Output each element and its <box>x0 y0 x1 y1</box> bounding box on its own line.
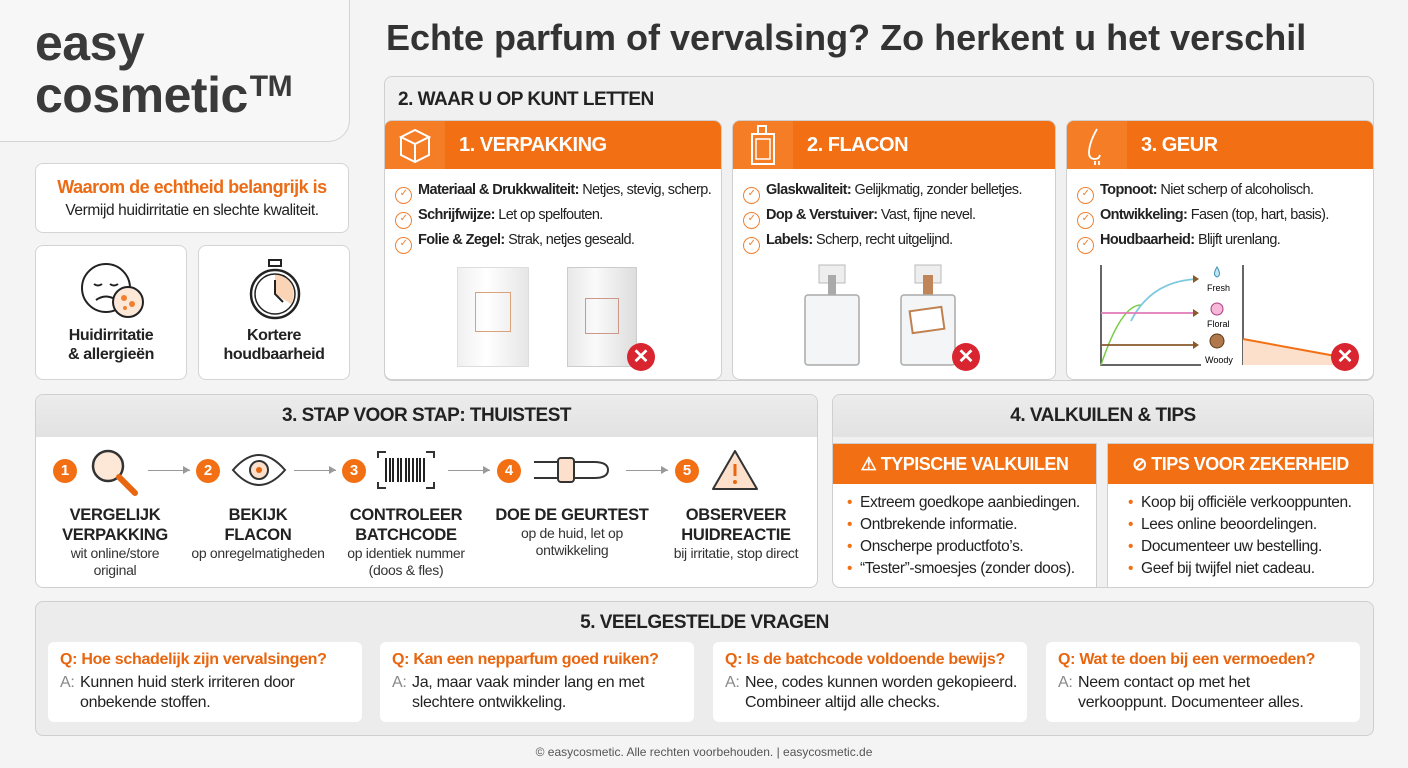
faq 1: Kunnen huid sterk irriteren door onbekende stoffen. <box>80 674 295 711</box>
list: Documenteer uw bestelling. <box>1141 538 1322 555</box>
chart: scent development <box>1100 265 1334 366</box>
text: HUIDREACTIE <box>681 526 791 544</box>
text: wit online/store <box>71 545 159 561</box>
label: & allergieën <box>68 346 154 363</box>
faq 3 <box>713 642 1027 722</box>
header <box>385 121 721 169</box>
faq 1 <box>48 642 362 722</box>
list: Lees online beoordelingen. <box>1141 516 1317 533</box>
text: ontwikkeling <box>536 542 608 558</box>
text: op de huid, let op <box>521 525 623 541</box>
faq 2: Q: Kan een nepparfum goed ruiken? <box>392 651 659 668</box>
icon: barcode <box>377 451 435 489</box>
text: VERPAKKING <box>62 526 168 544</box>
panel: veelgestelde vragen <box>35 601 1374 736</box>
faq 2 <box>380 642 694 722</box>
text: original <box>94 562 136 578</box>
checklist: Ontwikkeling: Fasen (top, hart, basis). <box>1100 207 1329 223</box>
text: op identiek nummer <box>347 545 465 561</box>
label: Kortere <box>247 327 301 344</box>
header: ⊘ TIPS VOOR ZEKERHEID <box>1132 454 1349 474</box>
card: flacon: ✕ <box>958 346 974 368</box>
icon: stopwatch <box>250 259 300 320</box>
list: Ontbrekende informatie. <box>860 516 1017 533</box>
card: verpakking <box>384 120 722 380</box>
icon: magnifier <box>92 450 138 496</box>
why box <box>35 163 349 233</box>
text: VERGELIJK <box>70 506 160 524</box>
card: typische valkuilen <box>832 443 1097 588</box>
card: tips <box>1107 443 1374 588</box>
card: verpakking: ✕ <box>633 346 649 368</box>
checklist <box>743 182 1022 254</box>
why heading: Waarom de echtheid belangrijk is <box>57 177 327 197</box>
logo text: easy <box>35 15 144 71</box>
icon: sad face <box>81 263 144 318</box>
label <box>224 327 324 363</box>
list: Geef bij twijfel niet cadeau. <box>1141 560 1315 577</box>
icon: eye <box>232 454 286 486</box>
text: (doos & fles) <box>369 562 443 578</box>
header <box>1067 121 1373 169</box>
step 3 <box>342 451 465 578</box>
title: Echte parfum of vervalsing? Zo herkent u het verschil <box>386 17 1306 58</box>
checklist <box>1077 182 1329 254</box>
heading <box>833 395 1373 437</box>
step 2 <box>191 454 325 561</box>
step 5 <box>674 450 798 561</box>
checklist: Labels: Scherp, recht uitgelijnd. <box>766 232 953 248</box>
images: bottles <box>804 264 956 366</box>
header: 1. VERPAKKING <box>459 134 607 156</box>
list <box>1128 494 1352 577</box>
icon: warning <box>712 450 758 490</box>
checklist: Folie & Zegel: Strak, netjes geseald. <box>418 232 634 248</box>
heading <box>36 395 817 437</box>
header: 2. FLACON <box>807 134 908 156</box>
header <box>833 444 1096 484</box>
checklist <box>395 182 711 254</box>
text: bij irritatie, stop direct <box>674 545 798 561</box>
header: ⚠ TYPISCHE VALKUILEN <box>861 454 1068 474</box>
card: geur: ✕ <box>1337 346 1353 368</box>
faq 4: Q: Wat te doen bij een vermoeden? <box>1058 651 1315 668</box>
text: CONTROLEER <box>350 506 462 524</box>
panel: waar u op kunt letten <box>384 76 1374 381</box>
faq 4: A: <box>1058 674 1073 691</box>
logo text: cosmeticTM <box>35 67 292 123</box>
checklist: Schrijfwijze: Let op spelfouten. <box>418 207 603 223</box>
faq 4 <box>1046 642 1360 722</box>
faq 3: Nee, codes kunnen worden gekopieerd. Combineer altijd alle checks. <box>745 674 1017 711</box>
text: OBSERVEER <box>686 506 786 524</box>
footer: © easycosmetic. Alle rechten voorbehouden. | easycosmetic.de <box>536 745 872 759</box>
step 4 <box>495 457 649 558</box>
faq 3: Q: Is de batchcode voldoende bewijs? <box>725 651 1005 668</box>
faq 2: Ja, maar vaak minder lang en met slechtere ontwikkeling. <box>412 674 644 711</box>
checklist: Materiaal & Drukkwaliteit: Netjes, stevig, scherp. <box>418 182 711 198</box>
header <box>733 121 1055 169</box>
heading: 3. STAP VOOR STAP: THUISTEST <box>282 405 571 426</box>
card: huidirritatie <box>35 245 187 380</box>
label <box>68 327 154 363</box>
checklist: Glaskwaliteit: Gelijkmatig, zonder belletjes. <box>766 182 1022 198</box>
card: houdbaarheid <box>198 245 350 380</box>
text: 5 <box>683 462 691 479</box>
text: DOE DE GEURTEST <box>495 506 649 524</box>
list: Onscherpe productfoto’s. <box>860 538 1023 555</box>
card: flacon <box>732 120 1056 380</box>
text: 2 <box>204 462 212 479</box>
heading: 5. VEELGESTELDE VRAGEN <box>580 612 829 633</box>
heading: 2. WAAR U OP KUNT LETTEN <box>398 89 654 110</box>
checklist: Houdbaarheid: Blijft urenlang. <box>1100 232 1280 248</box>
faq 1: Q: Hoe schadelijk zijn vervalsingen? <box>60 651 327 668</box>
step 1 <box>53 450 168 578</box>
text: 3 <box>350 462 358 479</box>
text: FLACON <box>225 526 291 544</box>
faq 4: Neem contact op met het verkooppunt. Documenteer alles. <box>1078 674 1304 711</box>
chart: scent development: Fresh <box>1207 283 1230 293</box>
list: Koop bij officiële verkooppunten. <box>1141 494 1352 511</box>
text: 4 <box>505 462 513 479</box>
header <box>1108 444 1373 484</box>
chart: scent development: Woody <box>1205 355 1233 365</box>
images: boxes <box>457 267 529 367</box>
faq 2: A: <box>392 674 407 691</box>
list: Extreem goedkope aanbiedingen. <box>860 494 1080 511</box>
panel: stap voor stap <box>35 394 818 588</box>
heading: 4. VALKUILEN & TIPS <box>1010 405 1196 426</box>
header: 3. GEUR <box>1141 134 1218 156</box>
text: 1 <box>61 462 69 479</box>
icon: wrist <box>534 457 609 483</box>
logo box <box>0 0 350 142</box>
list <box>848 494 1080 577</box>
checklist: Topnoot: Niet scherp of alcoholisch. <box>1100 182 1313 198</box>
text: BATCHCODE <box>355 526 457 544</box>
list: “Tester”-smoesjes (zonder doos). <box>860 560 1075 577</box>
panel: valkuilen & tips <box>832 394 1374 588</box>
why text: Vermijd huidirritatie en slechte kwaliteit. <box>65 202 319 219</box>
label: Huidirritatie <box>69 327 153 344</box>
text: BEKIJK <box>229 506 287 524</box>
label: houdbaarheid <box>224 346 324 363</box>
checklist: Dop & Verstuiver: Vast, fijne nevel. <box>766 207 975 223</box>
chart: scent development: Floral <box>1207 319 1230 329</box>
faq 3: A: <box>725 674 740 691</box>
logo text <box>35 15 292 123</box>
card: geur <box>1066 120 1374 380</box>
text: op onregelmatigheden <box>191 545 325 561</box>
faq 1: A: <box>60 674 75 691</box>
